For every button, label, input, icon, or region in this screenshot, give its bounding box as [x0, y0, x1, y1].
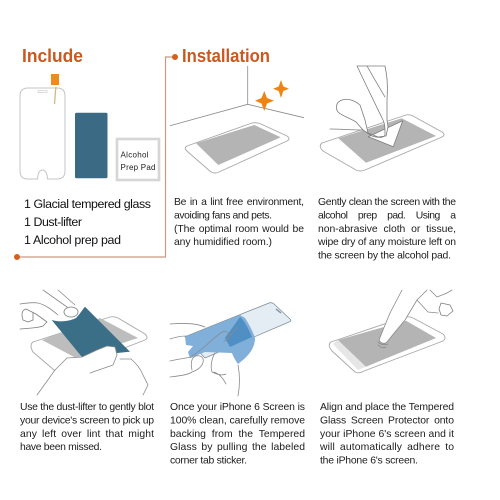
text: step 5: Glass Screen Protector onto [320, 416, 454, 426]
text: step 3: have been missed. [20, 442, 102, 453]
text: step 4 [170, 402, 305, 466]
text: step 4: Once your iPhone 6 Screen is [170, 402, 305, 413]
text: step 5: your iPhone 6's screen and it [320, 429, 454, 440]
text: step 5: will automatically adhere to [319, 442, 454, 453]
list: included items: 1 Glacial tempered glass [24, 197, 151, 211]
illustration: lint free room [170, 66, 304, 173]
list: included items: 1 Alcohol prep pad [24, 233, 121, 247]
text: step 2: alcohol prep pad. Using a [318, 210, 456, 222]
text: step 4: Glass by pulling the labeled [170, 442, 305, 453]
text: step 3 [20, 402, 154, 453]
text: step 4: corner tab sticker. [170, 456, 247, 466]
text: step 1: avoiding fans and pets. [174, 210, 272, 222]
text: step 5: the iPhone 6's screen. [320, 456, 418, 466]
text: step 1: any humidified room.) [174, 237, 272, 248]
illustration: peeling backing [170, 303, 291, 396]
connector line between include and installation [14, 54, 178, 260]
list: included items [24, 197, 151, 247]
icon: dust lifter [75, 113, 108, 178]
illustration: placing the protector [329, 290, 453, 373]
text: step 2 [317, 197, 456, 262]
illustration: cleaning the screen [320, 66, 444, 171]
illustration: dust lifter blotting [20, 290, 148, 395]
text: step 3: Use the dust-lifter to gently blot [20, 402, 154, 413]
icon: alcohol prep pad: Prep Pad [120, 163, 156, 172]
text: step 3: your device's screen to pick up [20, 416, 154, 426]
list: included items: 1 Dust-lifter [24, 215, 82, 229]
text: step 2: Gently clean the screen with the [318, 197, 456, 208]
icon: alcohol prep pad [117, 139, 159, 180]
heading: Installation: Installation [182, 45, 270, 66]
text: step 1: (The optimal room would be [174, 224, 304, 235]
text: step 3: any left over lint that might [20, 429, 154, 440]
text: step 1: Be in a lint free environment, [174, 197, 304, 208]
icon: alcohol prep pad: Alcohol [120, 150, 149, 160]
text: step 2: the screen by the alcohol pad. [318, 250, 451, 262]
text: step 2: wipe dry of any moisture left on [317, 237, 456, 248]
text: step 5 [319, 402, 454, 466]
text: step 2: non-abrasive cloth or tissue, [318, 224, 456, 235]
text: step 1 [174, 197, 304, 248]
text: step 5: Align and place the Tempered [320, 402, 454, 413]
icon: tempered glass [20, 74, 65, 179]
text: step 4: 100% clean, carefully remove [170, 416, 305, 426]
heading: Include: Include [22, 45, 83, 66]
text: step 4: backing from the Tempered [170, 429, 305, 440]
